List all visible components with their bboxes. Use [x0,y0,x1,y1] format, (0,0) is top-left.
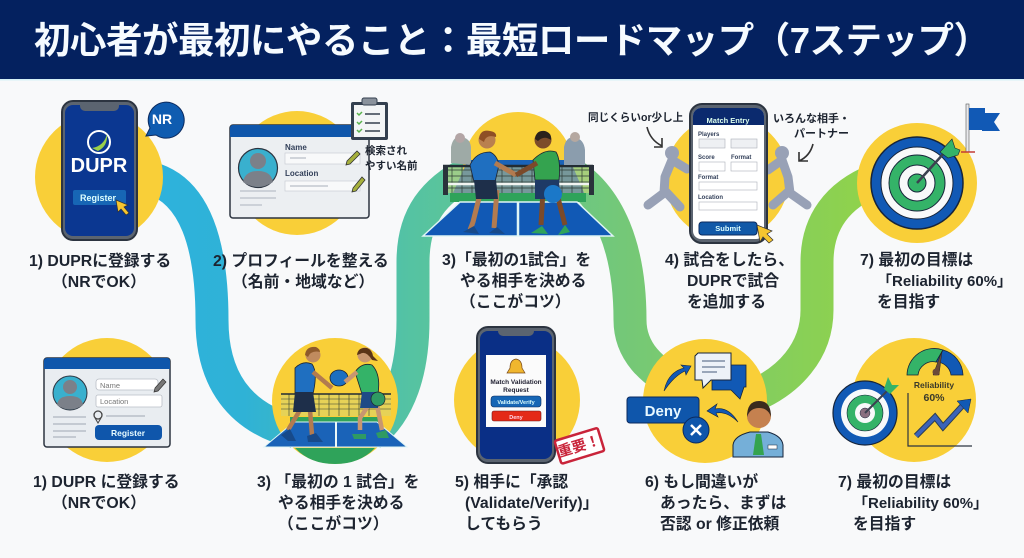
step 6 caption: 6) もし間違いが [645,472,758,491]
step 5: validation request phone: Validate/Verify [497,400,536,406]
step 5: validation request phone: Match Validation [490,379,542,386]
step 5: validation request phone [454,327,580,463]
step 3 bottom caption: 3) 「最初の 1 試合」を [257,473,419,491]
step 7 bottom: target, gauge and growth chart: Reliability [914,380,954,390]
step 3 top caption: 3)「最初の1試合」を [442,251,591,269]
step 4 caption: DUPRで試合 [687,272,779,290]
step 3 top caption: （ここがコツ） [460,292,571,311]
step 2 caption: （名前・地域など） [232,272,374,291]
partner note with arrow: パートナー [794,127,849,140]
step 6: deny and correction request [627,339,783,463]
step 7 bottom caption: 7) 最初の目標は [838,472,951,491]
flag icon [961,104,1000,152]
step 3 bottom: two players with paddles [264,338,407,464]
important stamp: 重要！ [556,432,602,461]
step 7 bottom caption: を目指す [853,515,916,533]
step 1 top: phone icon [35,101,163,241]
step 1 bottom: register window [44,338,170,462]
clipboard checklist icon [351,98,388,140]
NR speech bubble [146,102,184,138]
step 1 bottom: register window: Name [100,381,120,390]
step 2: profile window icon: Location [285,169,318,178]
step 4: match entry phone: Match Entry [707,116,750,125]
step 4: match entry phone: Format [698,175,718,181]
step 7 top caption: 7) 最初の目標は [860,250,973,269]
step 4: match entry phone: Format [731,155,751,161]
roadmap ribbon connecting the steps [150,170,875,435]
step 7 bottom caption: 「Reliability 60%」 [853,495,988,512]
step 6 caption: あったら、まずは [660,494,787,512]
opponent note with arrow: 同じくらいor少し上 [588,111,684,124]
step 1 bottom caption: （NRでOK） [52,494,146,512]
step 7 top: target icon [857,123,977,243]
step 1 bottom caption: 1) DUPR に登録する [33,472,180,491]
step 2 caption: 2) プロフィールを整える [213,252,389,270]
partner note with arrow: いろんな相手・ [773,111,850,125]
opponent note with arrow [588,111,684,147]
step 5: validation request phone: Request [503,387,530,394]
step 1 top: phone icon: Register [80,193,117,203]
step 4 caption: を追加する [687,293,766,311]
step 5: validation request phone: Deny [509,415,524,421]
step 2: profile window icon [230,111,369,235]
step 4: match entry phone: Submit [715,224,741,233]
step 7 top caption: 「Reliability 60%」 [877,273,1012,290]
step 5 caption: 5) 相手に「承認 [455,472,568,491]
title banner [0,0,1024,80]
partner note with arrow [773,111,850,161]
step 4: match entry phone: Score [698,155,715,161]
step 7 bottom: target, gauge and growth chart: 60% [923,392,945,404]
step 1 top: phone icon: DUPR [71,155,128,177]
step 1 bottom: register window: Location [100,397,128,406]
step 1 top caption: （NRでOK） [52,273,146,291]
step 4: match entry phone: Location [698,195,723,201]
step 4 caption: 4) 試合をしたら、 [665,251,794,269]
step 3 top caption: やる相手を決める [460,271,586,290]
step 4: match entry phone: Players [698,132,720,138]
title banner: 初心者が最初にやること：最短ロードマップ（7ステップ） [34,20,990,61]
step 5 caption: してもらう [465,515,543,533]
searchable name note: 検索され [365,144,407,157]
step 3 bottom caption: （ここがコツ） [278,514,389,533]
step 1 bottom: register window: Register [111,428,146,438]
step 6: deny and correction request: Deny [645,403,682,420]
step 5 caption: (Validate/Verify)」 [465,495,598,512]
step 7 bottom: target, gauge and growth chart [833,338,976,462]
searchable name note: やすい名前 [365,159,418,172]
NR speech bubble: NR [152,111,172,127]
step 7 top caption: を目指す [877,293,940,311]
step 3 bottom caption: やる相手を決める [278,493,404,512]
step 6 caption: 否認 or 修正依頼 [660,515,780,533]
step 4: match entry phone [648,104,807,243]
step 1 top caption: 1) DUPRに登録する [29,251,171,270]
step 3 top: handshake at the net [423,112,613,236]
step 2: profile window icon: Name [285,143,307,152]
